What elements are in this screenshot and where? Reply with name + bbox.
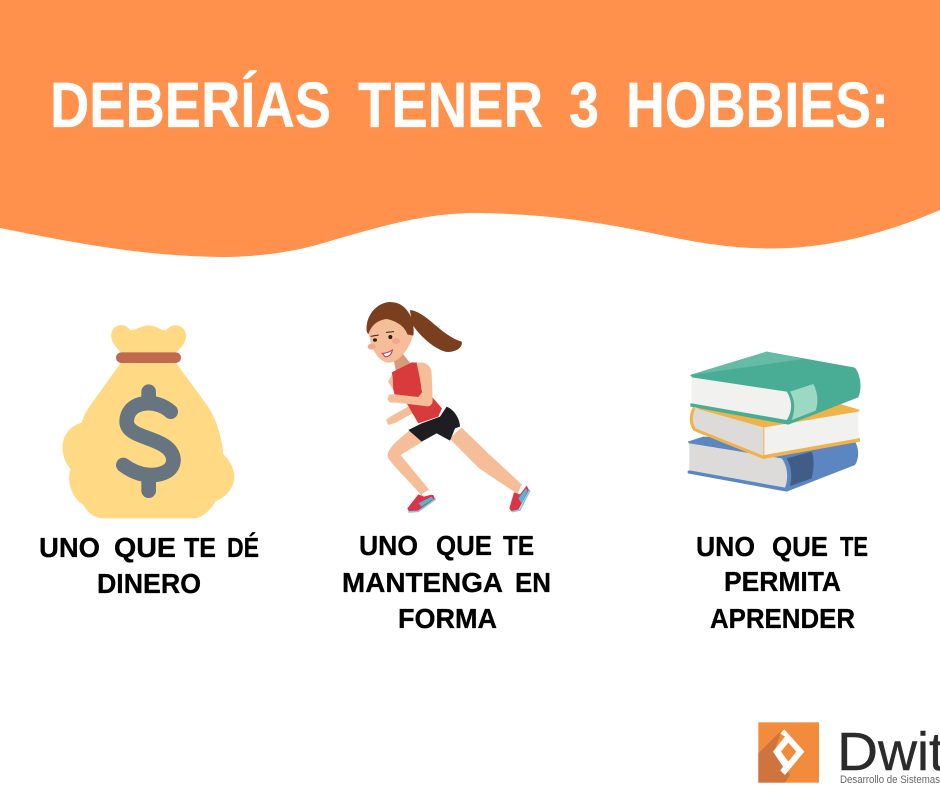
label: dinero: [39, 532, 259, 599]
logo: Dwit: [758, 722, 940, 786]
icon: money bag: [63, 325, 234, 518]
label: aprender: PERMITA: [724, 566, 841, 597]
label: forma: FORMA: [398, 603, 497, 634]
icon: stack of books: [688, 352, 861, 492]
label: aprender: [696, 531, 868, 634]
label: forma: [342, 530, 551, 634]
title: TENER: [358, 69, 543, 141]
logo mark: [758, 722, 819, 783]
label: forma: TE: [503, 530, 534, 561]
icon: woman running: [367, 302, 530, 512]
label: forma: UNO: [359, 530, 418, 561]
title: 3: [569, 69, 599, 141]
label: dinero: DINERO: [97, 568, 201, 599]
label: aprender: QUE: [772, 531, 828, 562]
label: dinero: UNO: [39, 532, 100, 563]
label: dinero: QUE: [114, 532, 176, 563]
title: DEBERÍAS: [50, 69, 331, 141]
label: aprender: APRENDER: [710, 603, 855, 634]
header wave background: [0, 0, 940, 257]
label: dinero: TE: [184, 532, 216, 563]
logo: Dwit: D: [837, 722, 878, 782]
label: aprender: TE: [840, 531, 868, 562]
label: dinero: DÉ: [227, 532, 259, 563]
title: [50, 69, 889, 141]
label: forma: EN: [515, 567, 551, 598]
label: forma: MANTENGA: [342, 567, 503, 598]
title: HOBBIES:: [626, 69, 889, 141]
label: forma: QUE: [436, 530, 492, 561]
label: aprender: UNO: [696, 531, 755, 562]
